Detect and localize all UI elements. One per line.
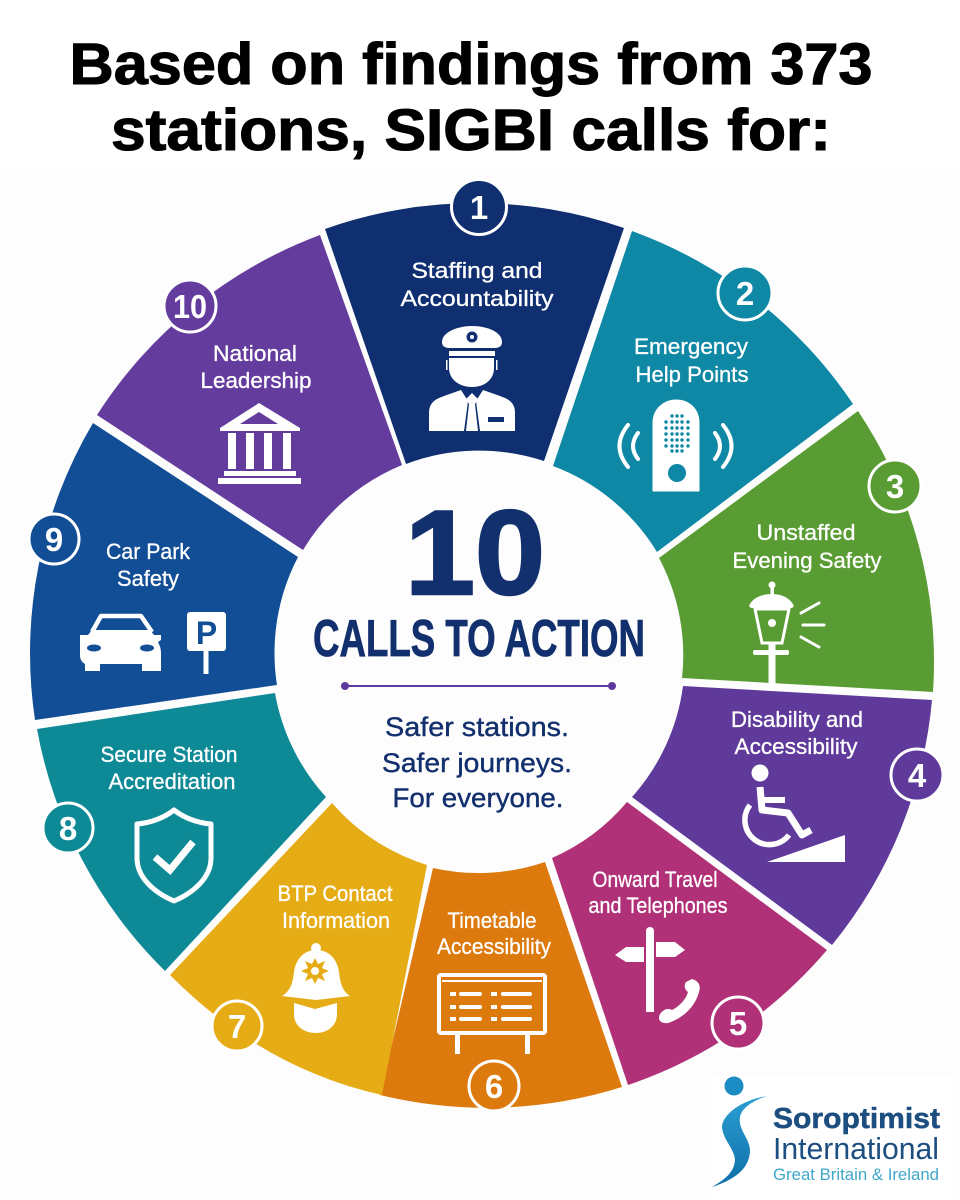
panel: 9 car park safety: Car Park: [106, 539, 191, 564]
icon: parking sign: [187, 612, 226, 674]
big number 10: 10: [405, 486, 545, 620]
icon: police officer: [429, 326, 515, 431]
panel: 7 BTP contact information: BTP Contact: [278, 881, 393, 906]
divider with dots: [341, 682, 616, 690]
panel: 1 staffing and accountability: Staffing and: [412, 258, 542, 283]
tagline: Safer stations.: [385, 712, 569, 742]
panel: 7 BTP contact information: [170, 803, 427, 1095]
logo figure: [712, 1076, 767, 1187]
number badge 3: 3: [886, 468, 904, 505]
panel: 4 disability and accessibility: [632, 686, 943, 945]
panel: 8 secure station accreditation: Secure Station: [100, 742, 238, 767]
number badge 3: [869, 460, 921, 512]
wheel of ten calls to action: [29, 180, 943, 1111]
tagline: [382, 712, 572, 813]
icon: wheelchair on ramp: [745, 764, 845, 862]
icon: police helmet: [282, 943, 350, 1033]
number badge 9: 9: [45, 521, 63, 558]
panel: 8 secure station accreditation: [37, 693, 326, 971]
panel: 4 disability and accessibility: Accessibility: [734, 734, 858, 759]
number badge 9: [29, 514, 79, 564]
number badge 10: [164, 280, 216, 332]
number badge 8: 8: [59, 810, 77, 847]
number badge 1: [452, 180, 506, 234]
icon: shield with check mark: [137, 810, 211, 901]
panel: 5 onward travel and telephones: and Telephones: [588, 893, 728, 918]
heading: calls to action: CALLS TO ACTION: [313, 610, 645, 668]
icon: timetable board: [439, 975, 545, 1054]
logo wordmark: International: [773, 1131, 939, 1166]
number badge 7: 7: [228, 1008, 246, 1045]
number badge 6: [469, 1061, 519, 1111]
number badge 8: [43, 803, 93, 853]
logo wordmark: Soroptimist: [773, 1103, 940, 1135]
number badge 5: 5: [729, 1005, 747, 1042]
panel: 9 car park safety: [29, 423, 298, 720]
central hub: [313, 486, 645, 813]
icon: signpost and telephone: [615, 927, 700, 1023]
panel: 9 car park safety: Safety: [117, 566, 180, 591]
panel: 5 onward travel and telephones: [552, 802, 827, 1085]
number badge 2: [718, 266, 772, 320]
panel: 2 emergency help points: Emergency: [634, 334, 749, 359]
panel: 10 national leadership: [97, 235, 402, 550]
panel: 4 disability and accessibility: Disability and: [731, 707, 863, 732]
panel: 6 timetable accessibility: Accessibility: [437, 934, 552, 959]
number badge 5: [712, 997, 764, 1049]
title: Based on findings from 373: [70, 32, 873, 97]
number badge 2: 2: [736, 275, 754, 312]
panel: 10 national leadership: Leadership: [200, 368, 312, 393]
panel: 1 staffing and accountability: Accountability: [400, 286, 554, 311]
icon: parking sign: P: [196, 615, 217, 651]
panel: 10 national leadership: National: [213, 341, 297, 366]
panel: 5 onward travel and telephones: Onward Travel: [592, 867, 718, 892]
icon: help point intercom: [620, 400, 732, 491]
number badge 7: [212, 1001, 262, 1051]
title: stations, SIGBI calls for:: [111, 98, 831, 163]
panel: 6 timetable accessibility: Timetable: [448, 908, 536, 933]
number badge 6: 6: [485, 1068, 503, 1105]
number badge 10: 10: [173, 288, 207, 325]
logo wordmark: Great Britain & Ireland: [773, 1165, 939, 1184]
panel: 2 emergency help points: Help Points: [636, 362, 748, 387]
panel: 3 unstaffed evening safety: [659, 411, 934, 692]
tagline: For everyone.: [392, 783, 564, 813]
tagline: Safer journeys.: [382, 748, 572, 778]
icon: car: [80, 616, 161, 671]
logo wordmark: [773, 1103, 940, 1184]
panel: 3 unstaffed evening safety: Unstaffed: [756, 520, 856, 545]
logo: Soroptimist International: [712, 1076, 952, 1200]
panel: 6 timetable accessibility: [380, 862, 622, 1111]
panel: 8 secure station accreditation: Accreditation: [108, 769, 236, 794]
icon: government building: [218, 403, 301, 484]
panel: 7 BTP contact information: Information: [282, 908, 390, 933]
panel: 2 emergency help points: [553, 231, 853, 552]
number badge 1: 1: [470, 189, 488, 226]
panel: 1 staffing and accountability: [325, 180, 624, 464]
title: [70, 32, 873, 163]
number badge 4: 4: [908, 757, 927, 794]
icon: street lamp: [749, 582, 824, 685]
number badge 4: [891, 749, 943, 801]
panel: 3 unstaffed evening safety: Evening Safety: [732, 548, 882, 573]
